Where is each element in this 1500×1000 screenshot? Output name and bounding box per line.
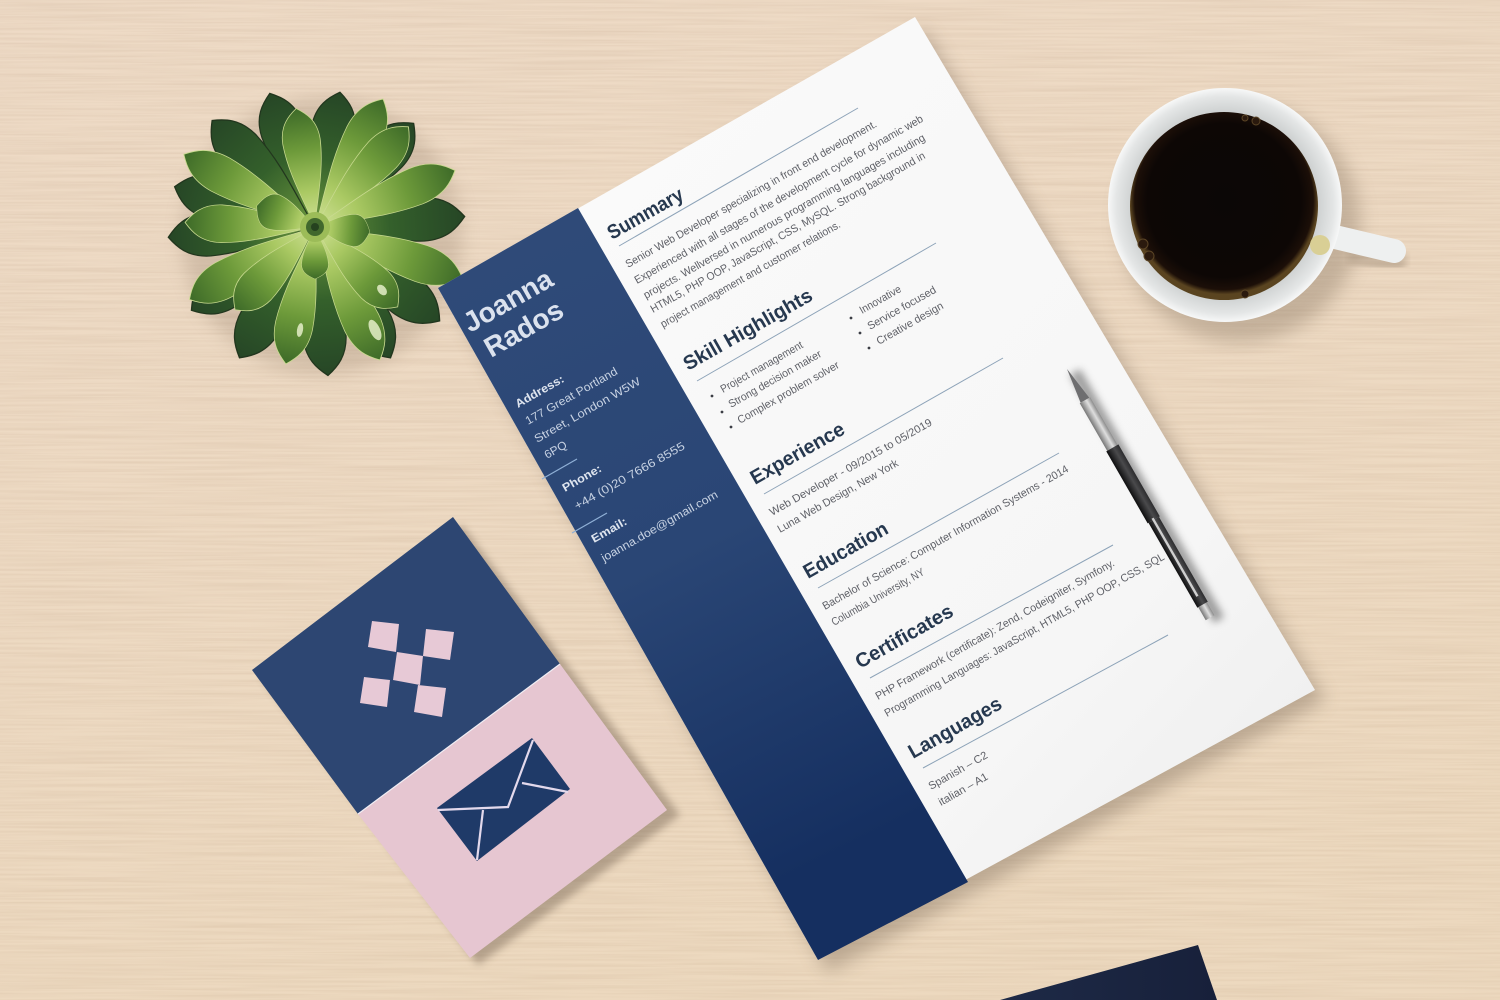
cup handle — [1335, 237, 1405, 266]
section: certificates: Programming Languages: JavaScript, HTML5, PHP OOP, CSS, SQL — [883, 551, 1167, 720]
email: joanna.doe@gmail.com — [599, 489, 720, 565]
section: certificates: Certificates — [852, 600, 957, 673]
email: Email: — [590, 516, 629, 546]
phone — [561, 440, 687, 513]
section: education: Columbia University, NY — [830, 566, 927, 629]
section: skill highlights: Strong decision maker — [727, 348, 824, 411]
business card — [252, 517, 680, 965]
icon: envelope — [437, 738, 570, 861]
section: experience — [747, 358, 1003, 536]
section: skill highlights: Skill Highlights — [680, 285, 817, 375]
pen — [1061, 366, 1219, 621]
pen shadow — [1075, 372, 1219, 620]
card shadow — [262, 525, 680, 965]
section: skill highlights: Complex problem solver — [736, 359, 842, 427]
section: education: Education — [800, 518, 892, 583]
coffee cup — [1108, 88, 1405, 342]
crema spot — [1310, 235, 1330, 255]
section: languages — [905, 635, 1168, 809]
section: skill highlights: Service focused — [866, 284, 938, 333]
card top panel — [252, 517, 560, 814]
coffee — [1130, 112, 1318, 300]
section: summary: Summary — [604, 183, 688, 244]
section: experience: Experience — [747, 418, 849, 489]
name: Joanna — [458, 263, 559, 338]
front leaves — [175, 90, 469, 368]
phone: +44 (0)20 7666 8555 — [573, 440, 687, 513]
section: skill highlights: Innovative — [858, 283, 903, 317]
sidebar — [438, 208, 968, 960]
plant centre — [300, 212, 330, 242]
section: languages: Spanish – C2 — [927, 750, 990, 793]
section: languages: Languages — [905, 693, 1006, 763]
section: certificates: PHP Framework (certificate): Zend, Codeigniter, Symfony. — [874, 557, 1117, 703]
sidebar contact — [458, 263, 720, 565]
section: experience: Web Developer - 09/2015 to 05/2019 — [768, 417, 934, 519]
cup body — [1108, 88, 1342, 322]
section: skill highlights — [680, 243, 946, 428]
section: education: Bachelor of Science: Computer Information Systems - 2014 — [821, 463, 1071, 613]
section: summary: Senior Web Developer specializing in front end development. — [624, 118, 879, 271]
paper — [438, 17, 1315, 960]
resume sheet — [438, 17, 1325, 972]
back leaves — [167, 87, 466, 377]
card bottom panel — [358, 664, 667, 958]
address: 6PQ — [543, 439, 569, 462]
section: summary: projects. Wellversed in numerous programming languages including — [642, 132, 927, 302]
address: Address: — [514, 374, 566, 411]
pen body — [1061, 366, 1216, 621]
section: summary: HTML5, PHP OOP, JavaScript, CSS, MySQL. Strong background in — [649, 150, 928, 316]
section: summary: Experienced with all stages of the development cycle for dynamic web — [633, 113, 925, 287]
phone: Phone: — [561, 463, 604, 495]
section: summary: project management and customer relations. — [659, 219, 843, 331]
icon: checker logo — [360, 621, 454, 717]
section: skill highlights: Project management — [719, 339, 805, 396]
sheet shadow — [452, 30, 1325, 972]
section: skill highlights: Creative design — [875, 300, 946, 348]
section: languages: italian – A1 — [937, 771, 990, 809]
notebook corner — [1000, 945, 1217, 1000]
section: experience: Luna Web Design, New York — [776, 457, 901, 536]
name: Rados — [479, 294, 569, 363]
leaf highlights — [296, 283, 389, 342]
cup shadow — [1120, 102, 1360, 342]
name — [458, 263, 569, 363]
plant — [167, 87, 469, 377]
bubbles — [1138, 115, 1260, 298]
address: 177 Great Portland — [524, 366, 620, 428]
address — [514, 366, 643, 462]
address: Street, London W5W — [533, 376, 643, 446]
